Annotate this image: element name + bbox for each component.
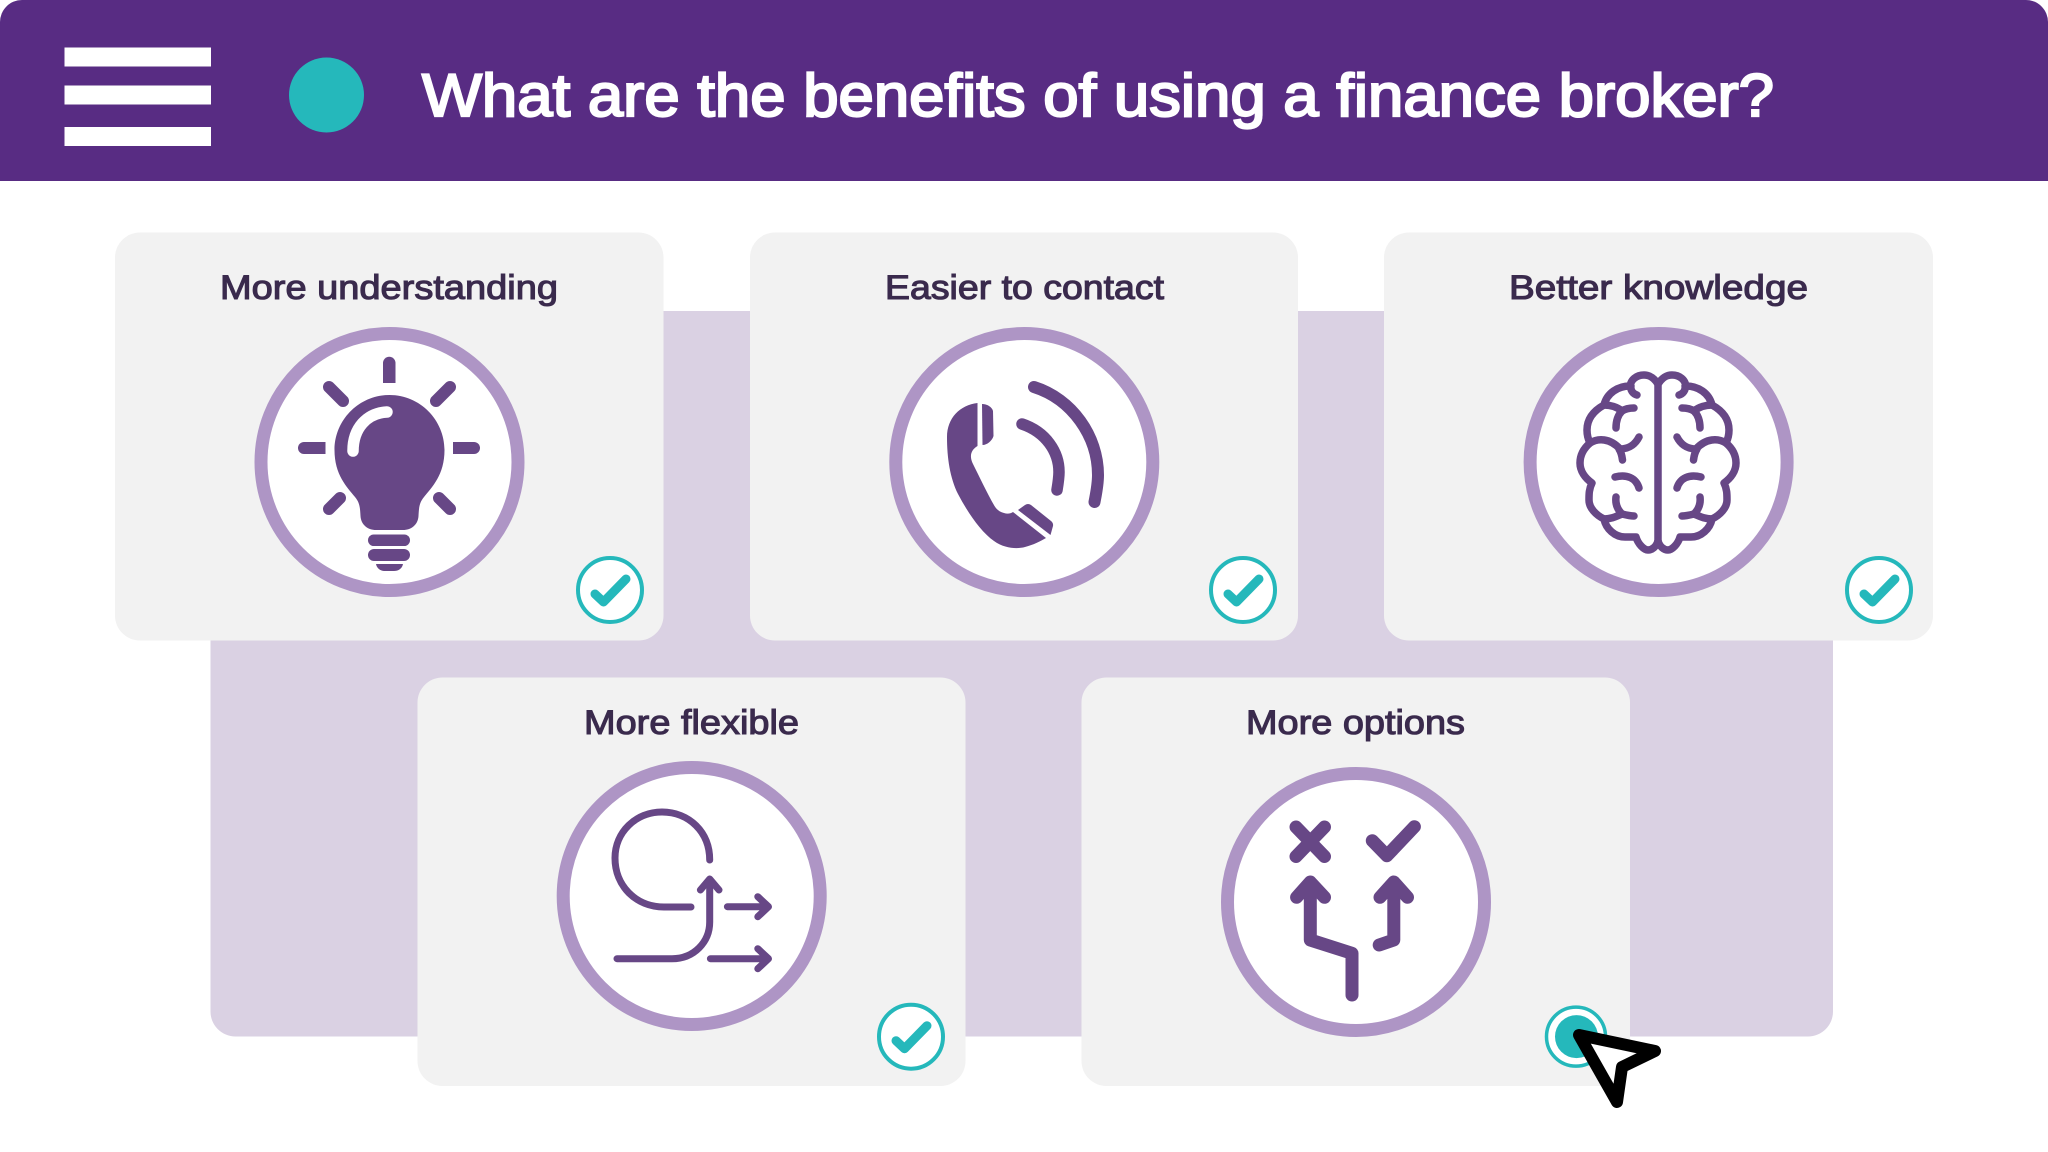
heading: more options: More options (1246, 704, 1465, 742)
icon: selected radio dot (1546, 1007, 1606, 1066)
icon: menu bars (64, 48, 211, 146)
icon: light bulb (261, 334, 518, 590)
icon: forked path choices (1228, 774, 1484, 1030)
icon: mouse cursor (1579, 1035, 1655, 1102)
panel: better knowledge (1384, 232, 1933, 640)
icon: flexible route arrows (563, 768, 820, 1024)
panel: more understanding (115, 232, 664, 640)
icon: teal dot (289, 58, 364, 132)
heading: better knowledge: Better knowledge (1509, 269, 1808, 307)
panel: more options (1082, 678, 1630, 1086)
heading: easier to contact: Easier to contact (885, 269, 1165, 307)
panel: more flexible (418, 678, 966, 1086)
header banner (0, 0, 2048, 181)
heading: more understanding: More understanding (220, 269, 558, 307)
lavender background panel (210, 311, 1833, 1036)
heading: more flexible: More flexible (584, 704, 799, 742)
icon: check mark (1847, 558, 1911, 622)
icon: check mark (1211, 558, 1275, 622)
icon: brain (1530, 334, 1787, 590)
icon: check mark (578, 558, 642, 622)
panel: easier to contact (750, 232, 1298, 640)
icon: check mark (879, 1005, 943, 1069)
icon: telephone (896, 334, 1153, 590)
title: What are the benefits of using a finance broker? (422, 62, 1774, 129)
